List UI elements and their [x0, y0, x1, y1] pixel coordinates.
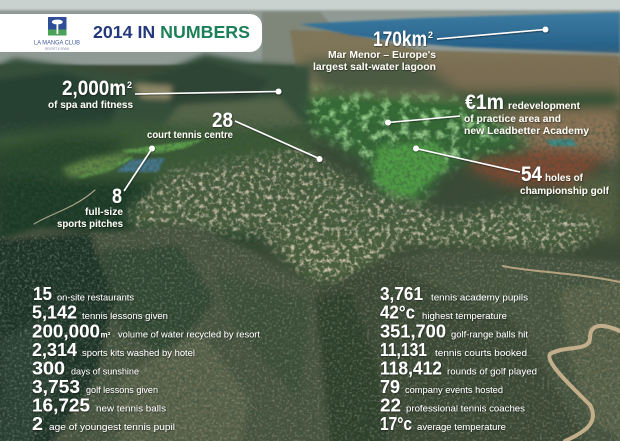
callout: 1 million redevelopment — [385, 91, 589, 137]
callout: 28 court tennis centre: 28 — [212, 109, 233, 132]
logo: La Manga Club: LA MANGA CLUB — [34, 40, 80, 46]
statistics list: right column: rounds of golf played — [447, 366, 537, 378]
callout: 54 holes of golf: championship golf — [520, 185, 609, 197]
callout: 8 sports pitches — [57, 146, 155, 230]
statistics list: right column: 22 — [380, 396, 401, 416]
statistics list: left column: m³ — [100, 330, 111, 340]
callout: 2,000 m2 spa and fitness: 2,000m — [62, 77, 126, 100]
callout: 2,000 m2 spa and fitness: 2 — [127, 80, 132, 90]
statistics list: left column: golf lessons given — [86, 385, 158, 396]
callout: 8 sports pitches: 8 — [112, 185, 122, 208]
callout: 170 km2 Mar Menor: 170km — [373, 28, 427, 51]
hazy sky and distant land — [0, 0, 620, 110]
statistics list: right column: 17°c — [380, 414, 412, 434]
statistics list: right column: 42°c — [380, 302, 415, 322]
statistics list: right column: 351,700 — [380, 322, 446, 342]
callout: 1 million redevelopment: of practice area and — [464, 113, 561, 125]
statistics list: right column: 118,412 — [380, 358, 442, 378]
callout: 28 court tennis centre — [147, 109, 322, 162]
callout: 8 sports pitches: sports pitches — [57, 218, 123, 230]
callout: 1 million redevelopment: redevelopment — [508, 100, 580, 112]
statistics list: left column: days of sunshine — [71, 366, 139, 378]
statistics list: right column: 3,761 — [380, 284, 423, 304]
callout: 170 km2 Mar Menor: 2 — [428, 30, 433, 40]
statistics list: left column: sports kits washed by hotel — [82, 348, 195, 359]
callout: 170 km2 Mar Menor — [313, 26, 548, 73]
callout: 28 court tennis centre: court tennis centre — [147, 129, 233, 141]
statistics list: left column — [32, 284, 260, 434]
statistics list: right column: golf-range balls hit — [451, 330, 528, 340]
callout: 54 holes of golf: holes of — [545, 172, 583, 184]
header banner — [0, 14, 262, 52]
statistics list: right column: company events hosted — [405, 385, 503, 396]
dirt roads — [34, 190, 620, 441]
logo: La Manga Club — [34, 17, 80, 51]
statistics list: right column: tennis courts booked — [435, 348, 527, 359]
statistics list: right column: tennis academy pupils — [431, 292, 528, 304]
sports pitches and reservoir — [62, 139, 578, 178]
statistics list: right column: average temperature — [417, 422, 506, 433]
dark mountains left — [0, 54, 310, 150]
statistics list: left column: 16,725 — [32, 396, 90, 416]
statistics list: right column: highest temperature — [422, 311, 507, 322]
statistics list: right column — [380, 284, 537, 434]
callout: 2,000 m2 spa and fitness — [48, 77, 282, 111]
statistics list: left column: new tennis balls — [96, 404, 166, 414]
valley texture — [0, 115, 620, 240]
callout: 54 holes of golf: 54 — [521, 163, 542, 186]
statistics list: left column: 200,000 — [32, 322, 100, 342]
middle ground farmland and hills — [300, 56, 620, 240]
golf course — [302, 84, 530, 208]
statistics list: left column: tennis lessons given — [82, 311, 168, 322]
statistics list: left column: on-site restaurants — [57, 292, 134, 304]
sea: Mar Menor — [300, 12, 620, 53]
lower valley — [0, 122, 330, 245]
mountain texture — [0, 226, 620, 441]
statistics list: left column: 2,314 — [32, 340, 77, 360]
statistics list: right column: 11,131 — [380, 340, 427, 360]
statistics list: left column: 5,142 — [32, 302, 77, 322]
statistics list: left column: volume of water recycled by resort — [118, 330, 260, 340]
callout: 170 km2 Mar Menor: Mar Menor – Europe's — [328, 49, 436, 61]
callout: 54 holes of golf — [413, 146, 609, 197]
statistics list: right column: 79 — [380, 377, 400, 397]
logo: La Manga Club: RESORT & SPAIN — [45, 47, 70, 51]
statistics list: left column: 3,753 — [32, 377, 80, 397]
callout: 8 sports pitches: full-size — [85, 206, 123, 218]
callout: 170 km2 Mar Menor: largest salt-water lagoon — [313, 61, 436, 73]
statistics list: left column: age of youngest tennis pupil — [49, 422, 175, 433]
statistics list: left column: 300 — [32, 358, 65, 378]
foreground mountain — [0, 222, 620, 441]
town — [120, 143, 612, 288]
title: 2014 IN NUMBERS — [93, 22, 250, 42]
statistics list: left column: 2 — [32, 414, 43, 434]
callout: 2,000 m2 spa and fitness: of spa and fitness — [48, 99, 133, 111]
statistics list: right column: professional tennis coaches — [406, 404, 525, 414]
callout: 1 million redevelopment: €1m — [465, 91, 504, 114]
statistics list: left column: 15 — [33, 284, 52, 304]
callout: 1 million redevelopment: new Leadbetter Academy — [464, 125, 589, 137]
